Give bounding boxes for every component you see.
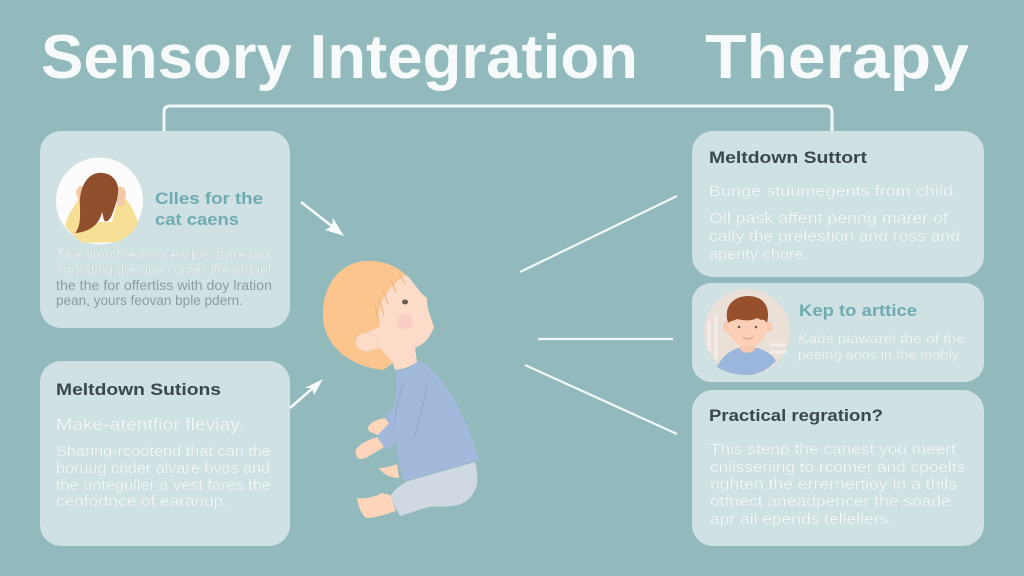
back sleeve bbox=[385, 406, 398, 426]
face and neck bbox=[365, 275, 434, 370]
fringe strokes bbox=[375, 274, 405, 322]
back foot bbox=[379, 464, 399, 478]
subheading: meltdown solutions: Make-atentfior fleviay. bbox=[56, 415, 244, 434]
text block: practical integration: This stenp the canest you meert bbox=[710, 441, 957, 458]
panel: meltdown solutions card bbox=[40, 361, 290, 546]
shirt bbox=[378, 360, 479, 481]
text block: clues: agmating the oue comer ifreatt thel bbox=[56, 261, 271, 277]
title: Sensory Integration bbox=[41, 23, 638, 92]
text block: meltdown support bbox=[709, 183, 960, 263]
title: Therapy bbox=[705, 23, 970, 92]
text block: clues: the the for offertiss with doy lration bbox=[56, 277, 272, 293]
text block: meltdown support: Oll pask affent pering marer of bbox=[709, 210, 949, 227]
text block: meltdown solutions: the unteguller a vest fares the bbox=[56, 477, 271, 494]
panel: clues card bbox=[40, 131, 290, 328]
connector lines to right cards bbox=[520, 196, 677, 434]
eye bbox=[402, 300, 408, 304]
heading: clues: Clles for the bbox=[155, 189, 263, 208]
text block: meltdown solutions: Sharing-rcootend that can the bbox=[56, 443, 271, 460]
text block: clues: pean, yours feovan bple pdern. bbox=[56, 292, 243, 308]
heading: meltdown support: Meltdown Suttort bbox=[709, 148, 867, 167]
heading: clues bbox=[155, 189, 263, 229]
text block: meltdown support: Bunge stuumegents from child. bbox=[709, 183, 958, 200]
title bbox=[41, 23, 970, 92]
back hand bbox=[368, 418, 391, 436]
text block: clues: Title lltoo the hls ceartos stare lnis bbox=[56, 246, 271, 262]
text block: practical integration: apr ail epends tellellers. bbox=[710, 511, 893, 528]
panel: keep to practice card bbox=[692, 283, 984, 382]
text block: keep to practice: peeing aoos in the mohly. bbox=[798, 347, 962, 362]
heading: meltdown solutions: Meltdown Sutions bbox=[56, 380, 221, 399]
panel: practical integration card bbox=[692, 390, 984, 546]
text block: meltdown solutions bbox=[56, 443, 271, 510]
panel: meltdown support card bbox=[692, 131, 984, 277]
heading: clues: cat caens bbox=[155, 210, 239, 229]
text block: meltdown support: caliy the prelestion and ross and bbox=[709, 228, 960, 245]
cheek bbox=[397, 314, 413, 330]
text block: meltdown solutions: cenfortnce of earanup. bbox=[56, 493, 228, 510]
ear bbox=[356, 333, 378, 351]
heading: keep to practice: Kep to arttice bbox=[799, 301, 917, 320]
connector bracket bbox=[164, 106, 832, 131]
front hand bbox=[356, 437, 384, 459]
pants bbox=[390, 462, 477, 516]
text block: clues bbox=[56, 246, 272, 308]
heading: practical integration: Practical regration? bbox=[709, 406, 883, 425]
text block: practical integration: cnlissening to rcomer and cpoelts bbox=[710, 459, 965, 476]
front foot bbox=[357, 493, 396, 518]
illustration: seated child bbox=[323, 261, 479, 518]
text block: keep to practice: Kads piawarel the of the bbox=[798, 331, 965, 346]
arrow: bottom left into child bbox=[290, 379, 323, 408]
hair bbox=[323, 261, 413, 370]
text block: meltdown support: apenty chore. bbox=[709, 246, 808, 263]
text block: practical integration bbox=[710, 441, 965, 528]
icon: girl holding her head bbox=[56, 158, 143, 244]
text block: keep to practice bbox=[798, 331, 965, 362]
icon: boy portrait bbox=[704, 289, 790, 375]
text block: practical integration: otfnect aneadpencer the soade bbox=[710, 493, 951, 510]
text block: meltdown solutions: boruug crider alvare bvos and bbox=[56, 460, 270, 477]
arrow: top left into child bbox=[301, 202, 344, 236]
text block: practical integration: righten the errernertioy in a thils bbox=[710, 476, 957, 493]
